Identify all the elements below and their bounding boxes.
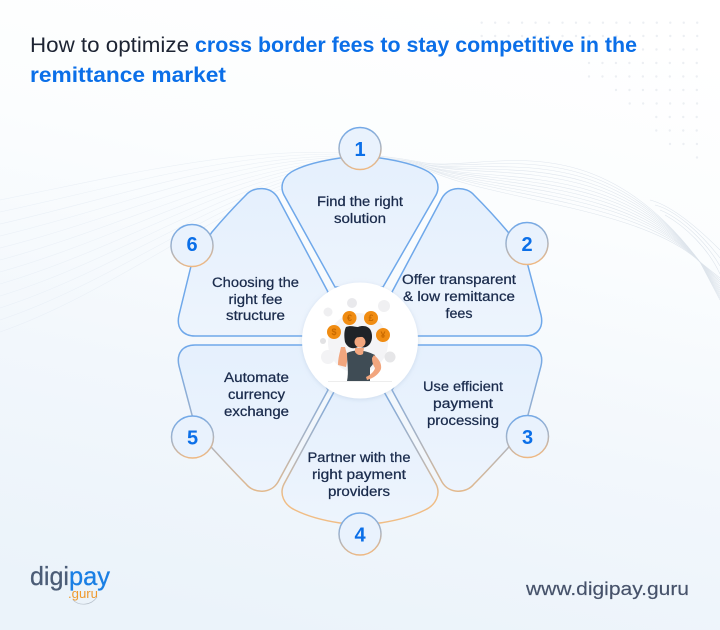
number badge 4: 4 [354,524,366,546]
title: cross border fees to stay competitive in the [195,34,637,57]
coin: pound: £ [368,313,374,323]
website url: www.digipay.guru [525,579,689,599]
number badge 2: 2 [521,234,533,256]
logo: digipay.guru: digi [30,561,69,591]
coin: euro: € [347,313,352,323]
logo: digipay.guru [30,561,110,604]
text: step 1: Find the right [317,194,403,209]
number badge 2 [506,222,548,264]
panel: step 6 [171,189,328,336]
title [30,34,637,87]
text: step 6: structure [226,308,285,323]
coin: dollar: $ [331,327,337,337]
number badge 6: 6 [186,234,198,256]
logo: digipay.guru: .guru [68,586,98,601]
decorative grey blobs [320,298,396,382]
background dot grid [482,23,699,158]
text: step 4: providers [328,484,390,499]
number badge 3: 3 [522,427,533,449]
text: step 6: right fee [228,292,282,307]
center circle illustration [302,282,418,398]
number badge 1: 1 [354,139,366,161]
text: step 5: exchange [224,404,289,419]
title: How to optimize [30,34,189,57]
title: remittance market [30,64,226,87]
panel: step 2 [392,189,548,336]
number badge 4 [339,513,381,555]
text: step 5: currency [228,387,285,402]
logo: digipay.guru: pay [69,561,110,591]
text: step 4: right payment [312,467,406,482]
text: step 1: solution [334,211,386,226]
panel: step 5 [172,345,328,491]
text: step 4: Partner with the [308,450,410,465]
number badge 6 [171,224,213,266]
text: step 2: fees [446,306,473,321]
number badge 1 [339,128,381,170]
text: step 2: Offer transparent [402,272,516,287]
number badge 3 [506,416,548,458]
text: step 3: payment [433,396,493,411]
coin: yen: ¥ [380,330,386,340]
panel: step 1 [282,128,438,287]
text: step 3: Use efficient [423,379,503,394]
number badge 5 [172,416,214,458]
panel: step 3 [392,345,548,491]
number badge 5: 5 [187,428,198,450]
text: step 2: & low remittance [403,289,515,304]
background wave lines [0,152,720,332]
text: step 6: Choosing the [212,275,299,290]
text: step 3: processing [427,413,499,428]
panel: step 4 [282,390,438,555]
text: step 5: Automate [224,370,289,385]
woman figure [338,326,381,381]
